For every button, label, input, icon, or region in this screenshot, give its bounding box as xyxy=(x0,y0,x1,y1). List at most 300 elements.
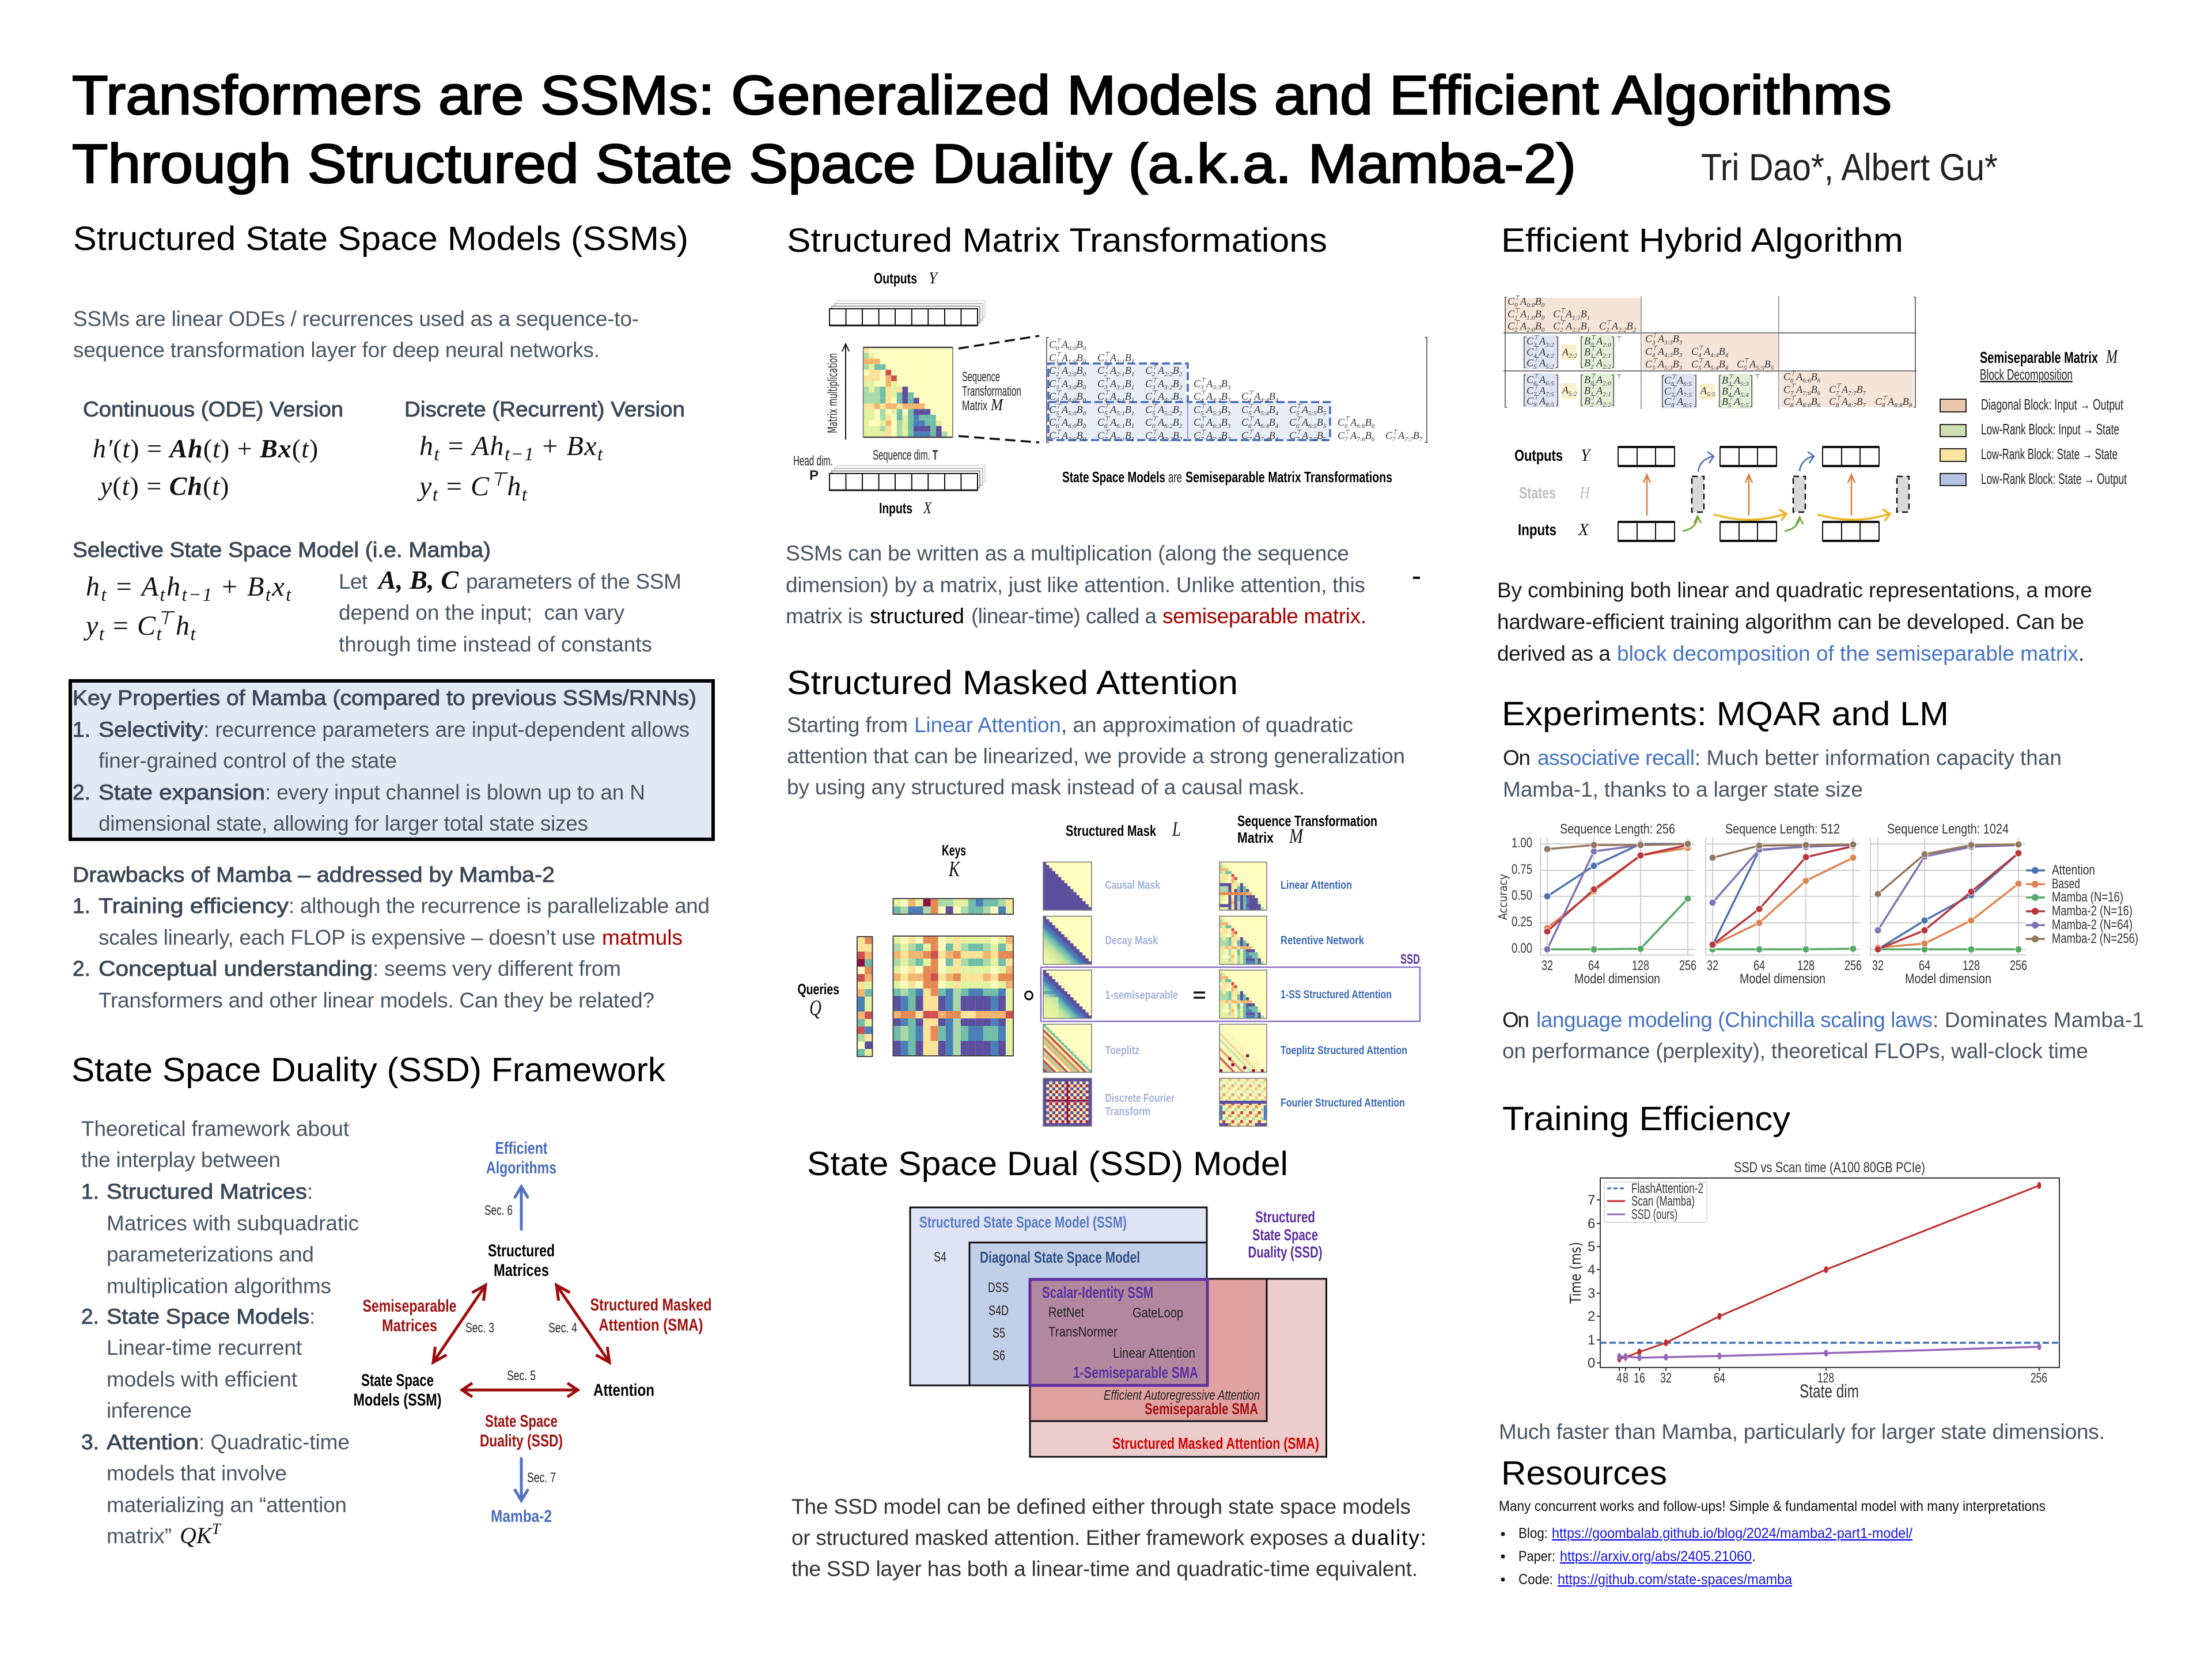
text: selective explanation: through time instead of constants xyxy=(339,632,652,656)
equations: selective: h xyxy=(86,571,101,602)
label: efficient algorithms xyxy=(486,1139,556,1177)
list: links: . xyxy=(1752,1548,1756,1565)
matrix: semiseparable entries: 3:1 xyxy=(1116,384,1125,391)
heading: SSD model: State Space Dual (SSD) Model xyxy=(807,1145,1288,1183)
matrix: semiseparable entries: A xyxy=(1061,339,1069,350)
matrix: semiseparable entries: 3 xyxy=(1227,397,1231,404)
matrix: semiseparable entries: ⊤ xyxy=(1296,403,1302,410)
matrix: block decomposition: 4 xyxy=(1728,392,1732,399)
legend: block decomposition: Diagonal Block: Input → Output xyxy=(1981,396,2124,413)
label: structured state space duality xyxy=(1248,1208,1323,1261)
x axis labels xyxy=(1541,958,2027,987)
matrix: semiseparable entries: 1 xyxy=(1131,423,1134,430)
callout: key properties: 1. xyxy=(73,718,90,741)
matrix: semiseparable entries: 7 xyxy=(1344,436,1348,443)
axis label: matrix multiplication: Matrix multiplication xyxy=(826,353,840,433)
matrix: block decomposition: ⊤ xyxy=(1728,374,1734,381)
matrix: block decomposition: ⊤ xyxy=(1671,385,1677,392)
matrix: semiseparable entries: 4 xyxy=(1275,436,1279,443)
matrix: semiseparable entries: 7 xyxy=(1200,436,1204,443)
row labels: Y xyxy=(1581,446,1592,465)
matrix: block decomposition: A xyxy=(1703,346,1711,357)
matrix: semiseparable entries: 0:0 xyxy=(1068,345,1077,352)
matrix: semiseparable entries: C xyxy=(1241,391,1248,402)
matrix: semiseparable entries: C xyxy=(1241,430,1248,441)
equations: selective: t xyxy=(266,585,272,605)
matrix: block decomposition: A xyxy=(1841,384,1849,395)
text: framework description: Theoretical framework about xyxy=(81,1117,350,1141)
text: language modeling: On xyxy=(1502,1008,1529,1032)
matrix: block decomposition: B xyxy=(1627,320,1633,332)
matrix: semiseparable entries: 4:4 xyxy=(1260,397,1269,404)
heading: training efficiency: Training Efficiency xyxy=(1502,1100,1790,1138)
callout: key properties: State expansion xyxy=(99,781,265,804)
label: sequence and head dims: P xyxy=(809,468,819,483)
list: links: https://arxiv.org/abs/2405.21060 xyxy=(1560,1548,1752,1565)
text: drawbacks: Conceptual understanding xyxy=(99,957,373,980)
list: links: Blog: xyxy=(1518,1525,1548,1541)
matrix: toeplitz structured attention: Toeplitz Structured Attention xyxy=(1281,1044,1407,1057)
matrix: block decomposition: 6:5 xyxy=(1546,380,1554,387)
box: structured masked attention xyxy=(1030,1279,1326,1457)
heatmap: queries xyxy=(857,937,872,1056)
x axis labels: 256 xyxy=(1844,958,1862,974)
x axis labels: Model dimension xyxy=(1740,971,1825,987)
text: hybrid algorithm description: hardware-efficient training algorithm can be developed. Can be xyxy=(1497,610,2084,634)
equations: selective: C xyxy=(137,611,156,641)
matrix: semiseparable entries: B xyxy=(1365,430,1372,441)
matrix: block decomposition: 2:2 xyxy=(1603,363,1611,370)
text: SSM definition xyxy=(73,307,639,362)
matrix: block decomposition: C xyxy=(1508,296,1514,307)
y tick labels: 2 xyxy=(1588,1309,1595,1324)
matrix: semiseparable entries: 7:2 xyxy=(1164,436,1173,443)
matrix: semiseparable entries: A xyxy=(1301,416,1309,428)
matrix: semiseparable entries: 3 xyxy=(1227,410,1231,417)
matrix: semiseparable entries: 6:5 xyxy=(1308,423,1317,430)
label: state space duality: State Space xyxy=(485,1412,558,1431)
matrix: semiseparable entries: 5:2 xyxy=(1164,410,1173,417)
matrix: semiseparable entries: 5 xyxy=(1200,410,1204,417)
arrow: structured matrices to attention xyxy=(556,1285,609,1362)
column headers xyxy=(1066,812,1377,847)
equations: discrete: = xyxy=(438,471,471,502)
matrix: semiseparable entries: C xyxy=(1194,391,1200,402)
arrows: input to output xyxy=(1643,475,1855,516)
matrix: semiseparable entries: ⊤ xyxy=(1104,416,1111,423)
column headers: Matrix xyxy=(1237,829,1274,846)
matrix: block decomposition: 1 xyxy=(1587,327,1590,334)
venn labels: S4 xyxy=(934,1249,946,1265)
matrix: semiseparable entries: 6 xyxy=(1372,423,1375,430)
operator: hadamard product xyxy=(1025,991,1032,999)
matrix: block decomposition: 5:2 xyxy=(1569,391,1577,397)
matrix: semiseparable entries: A xyxy=(1109,352,1117,363)
matrix: block decomposition xyxy=(1503,295,1916,409)
arrow: matrix multiplication direction xyxy=(842,344,849,440)
matrix: block decomposition: 6 xyxy=(1817,402,1821,409)
matrix: block decomposition: A xyxy=(1611,320,1619,332)
mask: discrete fourier xyxy=(1043,1078,1175,1126)
text: framework description: 3. xyxy=(81,1430,99,1454)
label: structured state space duality: Structured xyxy=(1255,1208,1315,1226)
matrix: semiseparable entries: 5 xyxy=(1056,410,1059,417)
matrix: semiseparable entries: ⊤ xyxy=(1056,390,1062,397)
matrix: block decomposition: ⊤ xyxy=(1533,373,1540,380)
text: framework description: T xyxy=(212,1520,222,1537)
matrix: semiseparable entries: 1 xyxy=(1131,436,1134,443)
text: masked attention description xyxy=(787,713,1405,799)
label: keys K xyxy=(942,842,966,881)
matrix: block decomposition: 2 xyxy=(1606,327,1609,334)
matrix: semiseparable entries: B xyxy=(1077,416,1083,428)
matrix: semiseparable entries: B xyxy=(1173,365,1179,376)
label: sequence transformation matrix: M xyxy=(990,396,1004,414)
text: structured matrix description xyxy=(786,541,1366,628)
text: associative recall: : Much better information capacity than xyxy=(1695,746,2062,770)
matrix: semiseparable entries: A xyxy=(1157,365,1165,376)
matrix: semiseparable entries: ⊤ xyxy=(1056,416,1062,423)
chart titles xyxy=(1560,821,2009,837)
row labels: Outputs xyxy=(1514,446,1563,464)
matrix: block decomposition: A xyxy=(1733,385,1741,397)
matrix: semiseparable entries: 6 xyxy=(1104,423,1108,430)
matrix: block decomposition: C xyxy=(1508,308,1514,320)
x tick labels: 64 xyxy=(1714,1370,1725,1386)
matrix: block decomposition: ⊤ xyxy=(1533,357,1540,363)
matrix: block decomposition: C xyxy=(1527,346,1533,358)
equations: selective: t−1 xyxy=(182,585,213,605)
matrix: block decomposition: 3 xyxy=(1679,339,1683,346)
label: structured matrices xyxy=(488,1241,555,1280)
stray dash xyxy=(1413,577,1420,579)
matrix: block decomposition: 7 xyxy=(1533,391,1537,398)
text: hybrid algorithm description: block decomposition of the semiseparable matrix xyxy=(1617,642,2078,665)
matrix: semiseparable entries: C xyxy=(1145,430,1152,441)
matrix: block decomposition: C xyxy=(1553,308,1560,320)
matrix: block decomposition: ⊤ xyxy=(1590,335,1597,342)
matrix: block decomposition: B xyxy=(1584,385,1590,396)
equations: continuous: h′(t) = Ah(t) + Bx(t) xyxy=(93,434,319,463)
list: links: Paper: xyxy=(1518,1548,1555,1565)
text: masked attention description: by using any structured mask instead of a causal mask. xyxy=(787,775,1305,799)
list: links: Code: xyxy=(1518,1571,1553,1588)
matrix: block decomposition: 2:0 xyxy=(1527,327,1535,334)
matrix: block decomposition: B xyxy=(1719,346,1725,357)
matrix: semiseparable entries: A xyxy=(1109,404,1117,415)
matrix: semiseparable entries: C xyxy=(1049,352,1056,363)
text: hybrid algorithm description xyxy=(1497,578,2092,665)
matrix: block decomposition: ⊤ xyxy=(1698,345,1705,352)
matrix: semiseparable entries: 0 xyxy=(1083,358,1086,365)
matrix: block decomposition: A xyxy=(1596,357,1603,369)
chart legend: Mamba (N=16) xyxy=(2052,889,2123,905)
venn labels: S5 xyxy=(993,1325,1005,1341)
chart legend: Mamba-2 (N=16) xyxy=(2052,903,2133,919)
matrix: block decomposition: 3 xyxy=(1679,352,1683,359)
text: masked attention description: Linear Attention xyxy=(914,713,1061,737)
text: selective explanation: depend on the input; can vary xyxy=(339,601,624,624)
text: language modeling: language modeling (Chinchilla scaling laws xyxy=(1536,1008,1933,1032)
matrix: semiseparable entries: B xyxy=(1269,416,1275,428)
matrix: semiseparable entries: ⊤ xyxy=(1200,377,1207,384)
label: queries Q: Q xyxy=(809,996,821,1020)
matrix: block decomposition: C xyxy=(1527,335,1533,347)
matrix: semiseparable entries: ⊤ xyxy=(1104,351,1111,358)
matrix: semiseparable entries: ⊤ xyxy=(1104,377,1111,384)
matrix: block decomposition: ⊤ xyxy=(1652,332,1658,339)
matrix: block decomposition: ⊤ xyxy=(1698,358,1705,365)
heading: experiments: Experiments: MQAR and LM xyxy=(1502,695,1949,733)
matrix: semiseparable entries: 2 xyxy=(1179,436,1183,443)
text: drawbacks xyxy=(73,863,710,1012)
matrix: semiseparable entries: ⊤ xyxy=(1152,429,1158,436)
matrix: semiseparable entries: ⊤ xyxy=(1248,403,1255,410)
x tick labels xyxy=(1616,1370,2047,1386)
matrix: semiseparable entries: 7 xyxy=(1104,436,1108,443)
matrix: semiseparable entries: 6 xyxy=(1152,423,1156,430)
venn labels: S4D xyxy=(988,1303,1009,1319)
label: efficient algorithms: Algorithms xyxy=(486,1158,556,1177)
matrix: block decomposition: 8 xyxy=(1836,402,1839,409)
matrix: semiseparable entries: 2 xyxy=(1179,371,1183,378)
matrix: semiseparable entries: 7 xyxy=(1056,436,1059,443)
text: framework description: State Space Models xyxy=(107,1305,309,1328)
matrix: block decomposition: B xyxy=(1584,357,1590,369)
matrix: block decomposition: B xyxy=(1584,335,1590,347)
callout: key properties: dimensional state, allowing for larger total state sizes xyxy=(99,812,588,835)
text: training efficiency: Much faster than Mamba, particularly for larger state dimensions. xyxy=(1499,1420,2105,1444)
matrix: semiseparable entries: ⊤ xyxy=(1056,377,1062,384)
mask: causal xyxy=(1043,862,1161,910)
x tick labels: 16 xyxy=(1634,1370,1645,1386)
matrix: block decomposition: ⊤ xyxy=(1560,320,1566,327)
matrix: block decomposition: ⊤ xyxy=(1590,384,1597,391)
text: framework description: : xyxy=(309,1305,315,1328)
x axis labels: 32 xyxy=(1541,958,1553,974)
matrix: block decomposition: C xyxy=(1829,384,1836,395)
plot title: SSD vs Scan time (A100 80GB PCIe) xyxy=(1734,1160,1925,1176)
matrix: block decomposition: 7:6 xyxy=(1802,390,1811,397)
matrix: block decomposition: A xyxy=(1539,346,1546,358)
matrix: block decomposition: 7 xyxy=(1863,390,1866,397)
heatmap: keys xyxy=(893,899,1013,914)
matrix: block decomposition: ⊤ xyxy=(1533,335,1540,342)
row labels: X xyxy=(1578,520,1590,539)
matrix: semiseparable entries: C xyxy=(1241,416,1248,428)
matrix: semiseparable entries: B xyxy=(1125,430,1131,441)
label: inputs X: X xyxy=(923,499,932,517)
matrix: semiseparable entries: 5 xyxy=(1104,410,1108,417)
label: sec 6: Sec. 6 xyxy=(484,1203,513,1218)
matrix: semiseparable entries: 7 xyxy=(1296,436,1300,443)
matrix: block decomposition: A xyxy=(1539,395,1546,407)
matrix: block decomposition: C xyxy=(1691,346,1698,357)
text: framework description: Attention xyxy=(107,1430,199,1454)
matrix: block decomposition: 2:2 xyxy=(1569,353,1577,359)
arrow: structured matrices to SSM xyxy=(433,1285,486,1362)
text: associative recall: Mamba-1, thanks to a larger state size xyxy=(1503,778,1863,801)
label: sequence transformation matrix: Transformation xyxy=(962,384,1021,399)
matrix: block decomposition: ⊤ xyxy=(1616,336,1622,343)
matrix: semiseparable entries: A xyxy=(1157,430,1165,441)
matrix: block decomposition: B xyxy=(1584,395,1590,407)
matrix: semiseparable entries: 0 xyxy=(1083,397,1086,404)
matrix: semiseparable entries: B xyxy=(1125,365,1131,376)
text: masked attention description: attention that can be linearized, we provide a strong generalization xyxy=(787,744,1405,768)
chart legend: Based xyxy=(2052,876,2080,892)
matrix: block decomposition: A xyxy=(1539,374,1546,385)
matrix: semiseparable entries: 7 xyxy=(1152,436,1156,443)
text: language modeling: : Dominates Mamba-1 xyxy=(1933,1008,2144,1032)
matrix: semiseparable entries: C xyxy=(1049,339,1056,350)
callout: key properties: 2. xyxy=(73,781,90,804)
text: associative recall: On xyxy=(1503,746,1531,770)
matrix: semiseparable entries: A xyxy=(1061,430,1069,441)
matrix: block decomposition: 5 xyxy=(1771,365,1774,372)
matrix: semiseparable entries: C xyxy=(1049,365,1056,376)
box: scalar identity overlap xyxy=(1030,1279,1207,1385)
matrix: semiseparable entries: ⊤ xyxy=(1344,429,1351,436)
matrix: semiseparable entries: 2:1 xyxy=(1116,371,1125,378)
text: framework description: matrix” xyxy=(107,1524,172,1548)
matrix: semiseparable entries: A xyxy=(1109,430,1117,441)
equations: selective: t xyxy=(101,585,108,605)
text: framework description: the interplay between xyxy=(81,1148,281,1172)
arrows: state to output xyxy=(1698,452,1814,472)
text: framework description: models that involve xyxy=(107,1461,287,1485)
title: Through Structured State Space Duality (a.k.a. Mamba-2) xyxy=(72,133,1576,195)
y tick labels: 7 xyxy=(1588,1192,1595,1208)
matrix: semiseparable entries: 6 xyxy=(1372,436,1375,443)
matrix: block decomposition: 2 xyxy=(1590,402,1594,408)
matrix: semiseparable entries: C xyxy=(1194,430,1200,441)
matrix: semiseparable entries: 4:0 xyxy=(1068,397,1077,404)
text: language modeling xyxy=(1502,1008,2144,1063)
text: drawbacks: : seems very different from xyxy=(373,957,621,980)
matrix: block decomposition: 6 xyxy=(1533,380,1537,387)
matrix: semiseparable entries: 2:0 xyxy=(1068,371,1077,378)
text: drawbacks: 1. xyxy=(73,894,90,918)
matrix: block decomposition: C xyxy=(1664,385,1671,397)
matrix: block decomposition: 6:5 xyxy=(1683,381,1692,388)
matrix: semiseparable entries: ⊤ xyxy=(1056,364,1062,371)
matrix: semiseparable entries: 2 xyxy=(1179,397,1183,404)
equations: continuous: y(t) = Ch(t) xyxy=(98,471,229,501)
matrix: semiseparable entries: A xyxy=(1301,404,1309,415)
matrix: semiseparable entries: B xyxy=(1317,430,1323,441)
matrix: retentive network xyxy=(1219,916,1365,964)
matrix: semiseparable entries: B xyxy=(1125,378,1131,389)
matrix: semiseparable entries: ⊤ xyxy=(1056,429,1062,436)
equations: continuous xyxy=(93,434,319,501)
matrix: semiseparable entries: 6 xyxy=(1296,423,1300,430)
text: framework description: 1. xyxy=(81,1180,99,1203)
y axis labels: 0.00 xyxy=(1512,941,1532,956)
matrix: block decomposition: 6 xyxy=(1790,377,1794,384)
series panel: length 512 xyxy=(1713,844,1853,949)
label: sequence and head dims xyxy=(793,448,938,483)
matrix: block decomposition: A xyxy=(1749,358,1756,370)
text: selective explanation xyxy=(339,565,681,656)
matrix: block decomposition: B xyxy=(1811,384,1817,395)
matrix: block decomposition: ⊤ xyxy=(1652,358,1658,365)
matrix: semiseparable entries: 5:0 xyxy=(1068,410,1077,417)
equations: discrete: t xyxy=(433,484,438,505)
x axis labels: 128 xyxy=(1632,958,1649,974)
x tick labels: 4 xyxy=(1616,1370,1622,1386)
y tick labels: 1 xyxy=(1588,1332,1595,1348)
matrix: semiseparable entries: 4:3 xyxy=(1213,397,1221,404)
matrix: block decomposition: 7:7 xyxy=(1848,390,1857,397)
matrix: block decomposition: 2 xyxy=(1633,327,1637,334)
y tick labels: 5 xyxy=(1588,1239,1595,1255)
matrix: semiseparable entries: ⊤ xyxy=(1104,403,1111,410)
matrix: block decomposition: C xyxy=(1527,374,1533,385)
axis ticks xyxy=(1597,1200,2039,1371)
matrix: block decomposition: 0 xyxy=(1590,342,1594,349)
matrix: semiseparable entries: 4:2 xyxy=(1164,397,1173,404)
matrix: semiseparable entries: B xyxy=(1173,416,1179,428)
matrix: semiseparable entries: 5:4 xyxy=(1260,410,1269,417)
column headers: Structured Mask xyxy=(1066,822,1156,839)
matrix: semiseparable entries: A xyxy=(1157,378,1165,389)
matrix: semiseparable entries: C xyxy=(1049,378,1056,389)
text: SSD model description: The SSD model can be defined either through state space models xyxy=(791,1495,1411,1518)
matrix: semiseparable entries: A xyxy=(1206,378,1213,389)
matrix: semiseparable entries: 4 xyxy=(1275,423,1279,430)
matrix: block decomposition: B xyxy=(1535,296,1541,307)
matrix: semiseparable entries: 3:0 xyxy=(1067,384,1077,391)
matrix: block decomposition: 2:1 xyxy=(1603,391,1611,398)
y axis labels: 0.75 xyxy=(1512,862,1532,877)
text: structured matrix description: structured xyxy=(870,604,964,628)
matrix: block decomposition: C xyxy=(1691,358,1698,370)
x tick labels: 32 xyxy=(1660,1370,1672,1386)
venn labels: RetNet xyxy=(1048,1305,1084,1320)
equations: selective: h xyxy=(166,571,182,602)
matrix: block decomposition: 0 xyxy=(1541,327,1545,334)
equations: discrete: t xyxy=(434,444,440,465)
matrix: block decomposition: 1:0 xyxy=(1527,315,1535,321)
matrix: block decomposition: A xyxy=(1596,395,1603,407)
text: framework description xyxy=(81,1117,359,1548)
mask: toeplitz: Toeplitz xyxy=(1105,1044,1139,1057)
matrix: semiseparable entries: 4 xyxy=(1275,397,1279,404)
matrix: block decomposition: B xyxy=(1673,346,1679,357)
matrix: block decomposition: ⊤ xyxy=(1590,373,1597,380)
label: structured masked attention: Attention (SMA) xyxy=(599,1316,703,1335)
mask: decay xyxy=(1043,916,1158,964)
matrix: block decomposition: 2:1 xyxy=(1603,353,1611,359)
matrix: semiseparable entries: A xyxy=(1109,391,1117,402)
state boxes xyxy=(1692,476,1909,512)
title xyxy=(72,65,1892,195)
equations: selective: A xyxy=(142,571,160,602)
text: hybrid algorithm description: derived as a xyxy=(1497,642,1611,665)
matrix: block decomposition: 4:2 xyxy=(1546,353,1554,359)
matrix: block decomposition: 3 xyxy=(1652,339,1656,346)
matrix: semiseparable entries: C xyxy=(1194,416,1200,428)
series: flash attention xyxy=(1600,1342,2059,1344)
text: drawbacks: Drawbacks of Mamba – addressed by Mamba-2 xyxy=(73,863,555,887)
matrix: semiseparable entries: C xyxy=(1338,416,1344,428)
text: drawbacks: scales linearly, each FLOP is expensive – doesn’t use xyxy=(99,926,596,949)
matrix: block decomposition: ⊤ xyxy=(1671,374,1677,381)
matrix: block decomposition: A xyxy=(1596,385,1603,396)
x axis labels: 64 xyxy=(1919,958,1930,974)
column headers: M xyxy=(1289,824,1304,847)
